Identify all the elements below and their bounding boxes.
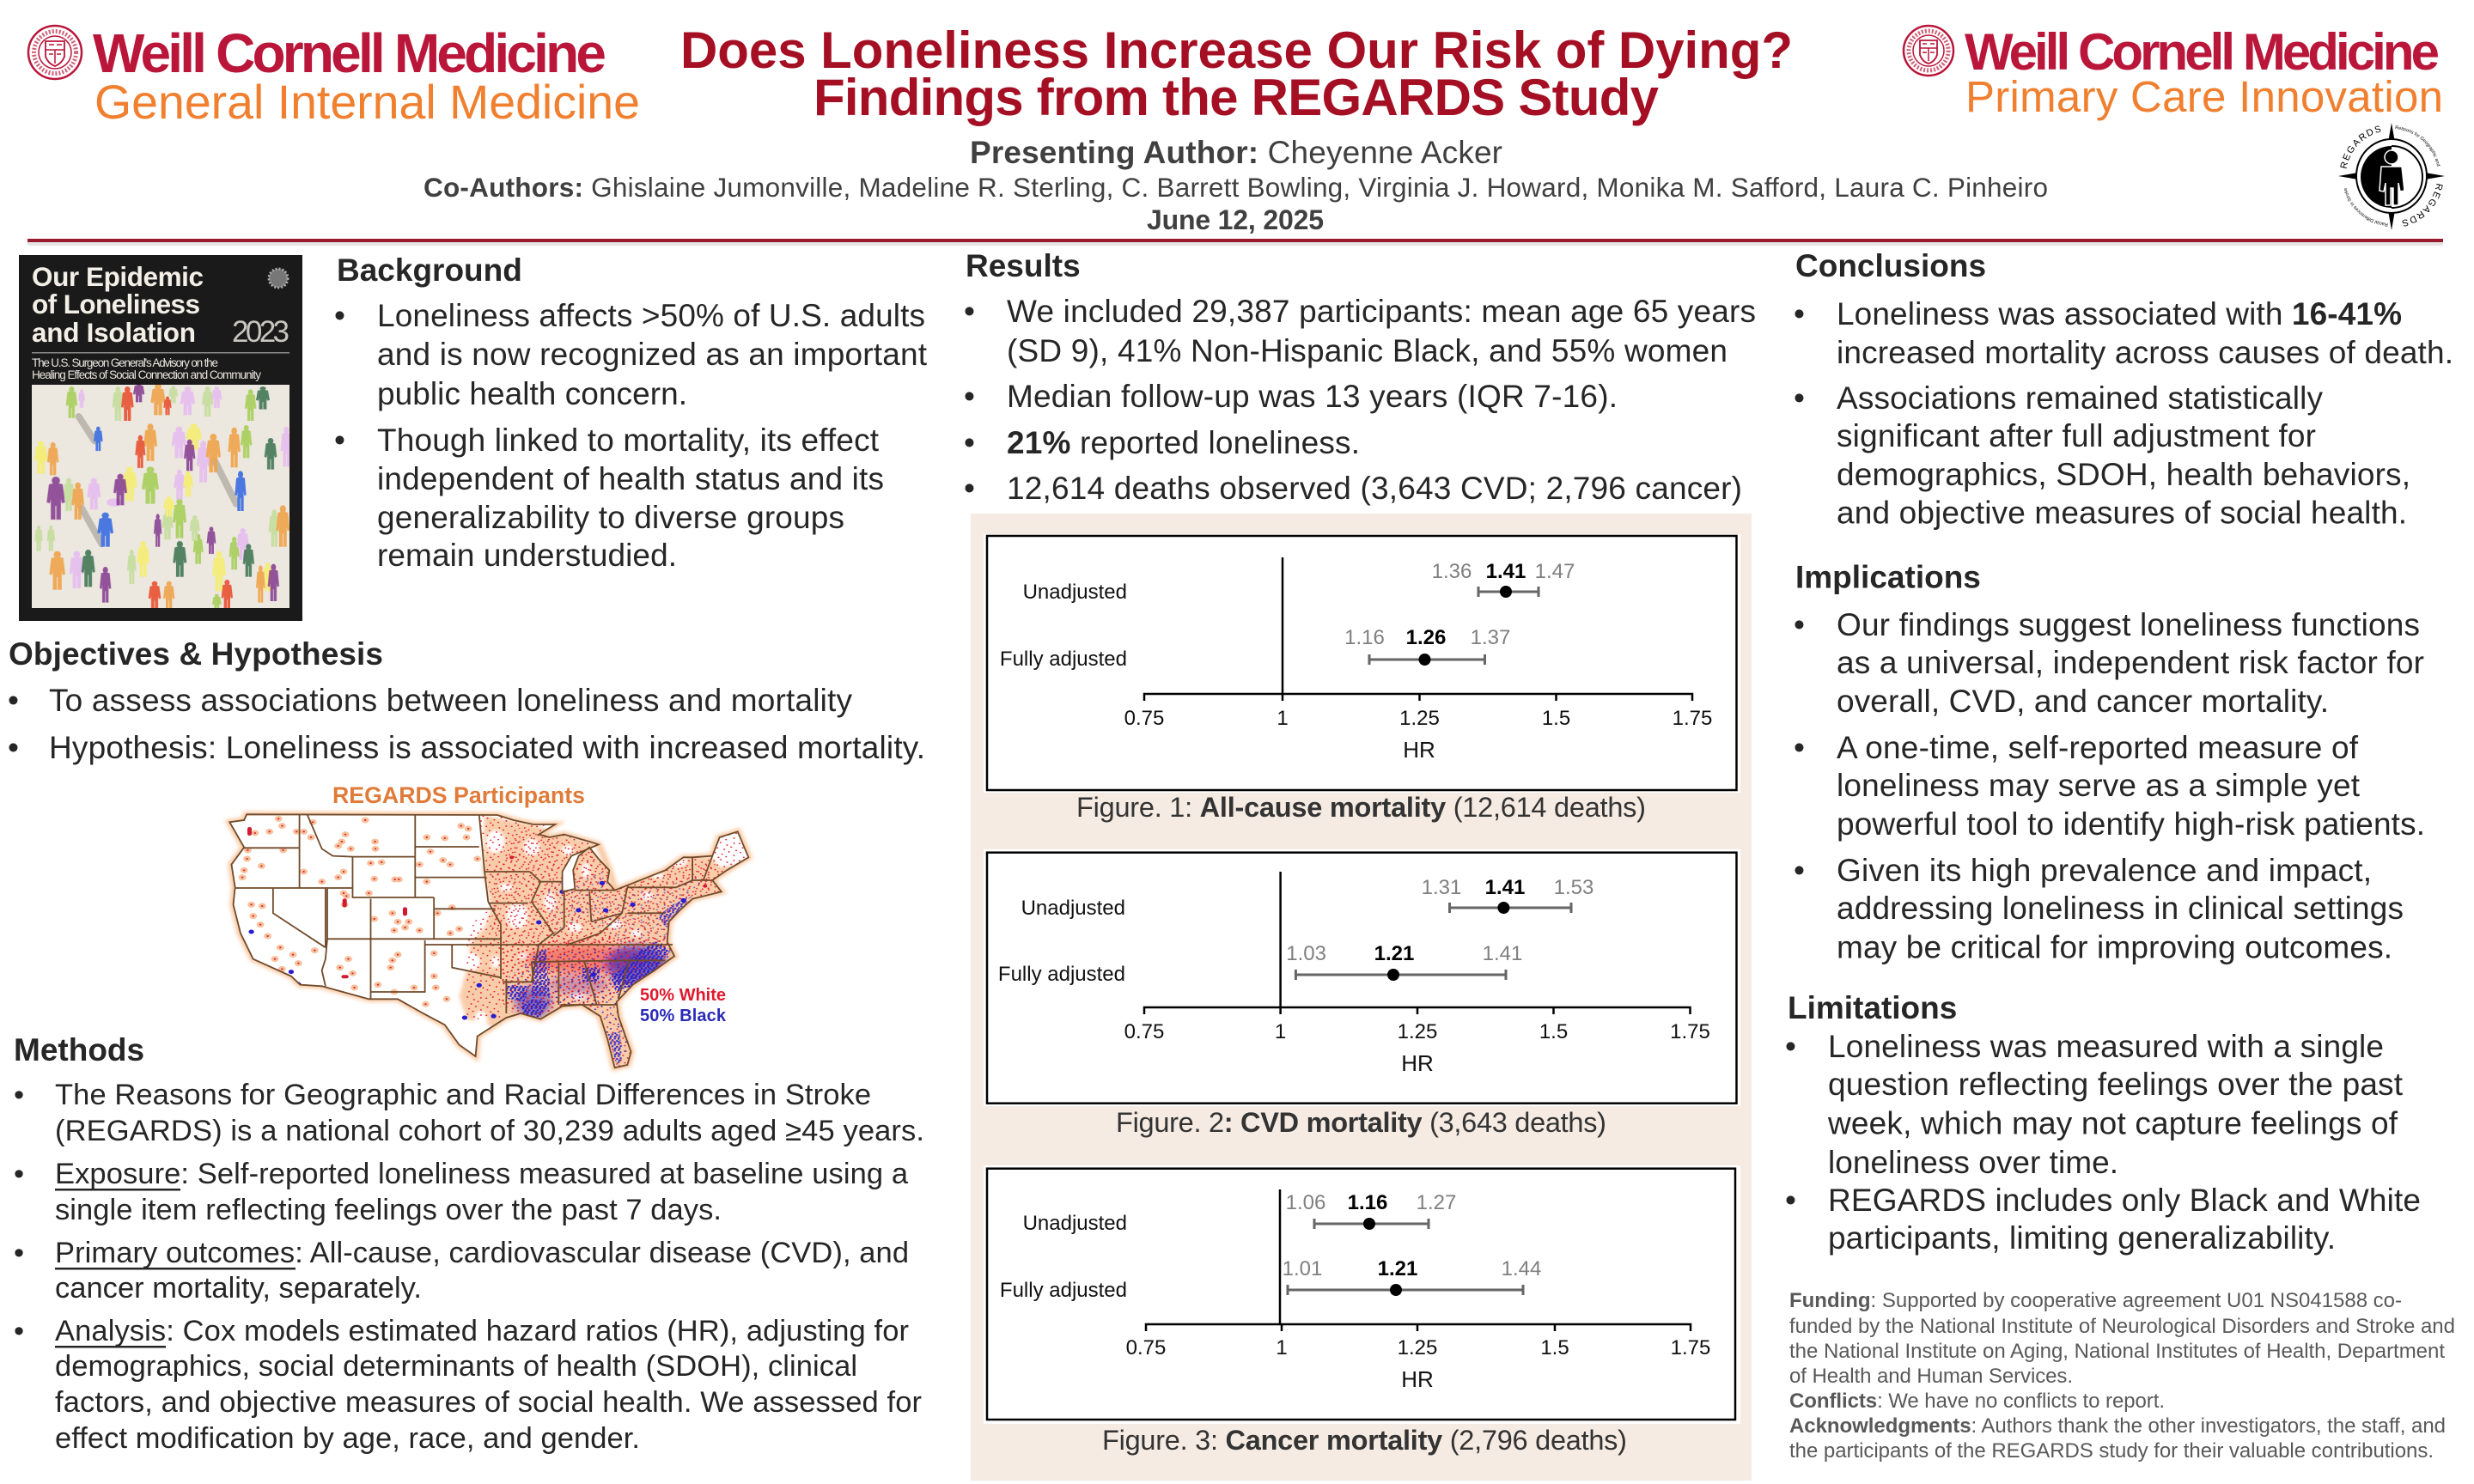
heading: results: Results bbox=[966, 248, 1081, 283]
chart: CVD mortality forest plot bbox=[984, 849, 1740, 1106]
heading: limitations: Limitations bbox=[1788, 990, 1957, 1025]
heading: background: Background bbox=[337, 252, 522, 288]
panel: objectives and hypothesis bbox=[8, 636, 925, 765]
results text: 12,614 deaths observed (3,643 CVD; 2,796 cancer) bbox=[1007, 471, 1742, 506]
authors block: Presenting Author: Cheyenne Acker bbox=[970, 135, 1502, 170]
cover title: and Isolation bbox=[32, 317, 196, 348]
icon: Weill Cornell seal right bbox=[1904, 26, 1953, 76]
heading: objectives: Objectives & Hypothesis bbox=[9, 636, 383, 672]
heading: conclusions: Conclusions bbox=[1795, 248, 1986, 283]
implications text: • bbox=[1794, 730, 1805, 765]
chart: all-cause mortality forest plot: HR bbox=[1403, 737, 1435, 763]
cover illustration of people bbox=[32, 382, 292, 611]
background text bbox=[334, 298, 928, 573]
icon: REGARDS compass logo: REGARDS bbox=[2340, 125, 2381, 168]
panel: conclusions bbox=[1794, 248, 2453, 531]
implications text: addressing loneliness in clinical settings bbox=[1837, 891, 2404, 926]
chart: cancer mortality forest plot: Unadjusted bbox=[1023, 1212, 1127, 1235]
chart: CVD mortality forest plot: 1.25 bbox=[1398, 1020, 1437, 1043]
cover title: of Loneliness bbox=[32, 289, 200, 319]
authors block: Co-Authors: Ghislaine Jumonville, Madeline R. Sterling, C. Barrett Bowling, Virginia J. Howard, Monika M. Safford, Laura C. Pinheiro bbox=[424, 172, 2048, 203]
methods text: Primary outcomes: All-cause, cardiovascular disease (CVD), and bbox=[55, 1237, 909, 1269]
implications text: • bbox=[1794, 853, 1805, 888]
panel: funding, conflicts, acknowledgments: funded by the National Institute of Neurological Disorders and Stroke and bbox=[1789, 1315, 2455, 1338]
caption: figure 2: Figure. 2: CVD mortality (3,643 deaths) bbox=[1116, 1107, 1606, 1138]
methods text: • bbox=[14, 1315, 24, 1347]
row: unadjusted 1.41: 1.41 bbox=[1485, 876, 1525, 899]
limitations text: Loneliness was measured with a single bbox=[1828, 1029, 2384, 1064]
background text: remain understudied. bbox=[377, 538, 677, 573]
title: Does Loneliness Increase Our Risk of Dying? bbox=[680, 21, 1793, 79]
panel: Surgeon General advisory cover bbox=[19, 255, 302, 621]
limitations text: REGARDS includes only Black and White bbox=[1828, 1183, 2421, 1218]
chart: CVD mortality forest plot: Fully adjusted bbox=[998, 963, 1125, 986]
chart: all-cause mortality forest plot bbox=[984, 534, 1740, 793]
limitations text: loneliness over time. bbox=[1828, 1145, 2118, 1180]
cover subtitle: Healing Effects of Social Connection and Community bbox=[32, 368, 261, 381]
methods text bbox=[14, 1079, 924, 1455]
header divider bbox=[27, 239, 2443, 246]
conclusions text: demographics, SDOH, health behaviors, bbox=[1837, 457, 2410, 492]
chart: all-cause mortality forest plot: 1.25 bbox=[1399, 707, 1440, 730]
panel: funding, conflicts, acknowledgments: Acknowledgments: Authors thank the other investigators, the staff, and bbox=[1789, 1414, 2446, 1438]
chart: all-cause mortality forest plot: 1.5 bbox=[1542, 707, 1570, 730]
background text: and is now recognized as an important bbox=[377, 337, 928, 372]
conclusions text bbox=[1794, 296, 2453, 531]
methods text: The Reasons for Geographic and Racial Differences in Stroke bbox=[55, 1079, 871, 1111]
methods text: demographics, social determinants of health (SDOH), clinical bbox=[55, 1350, 857, 1383]
methods text: • bbox=[14, 1237, 24, 1269]
panel: limitations bbox=[1785, 990, 2421, 1256]
row: fully adjusted 1.21: 1.01 bbox=[1283, 1257, 1322, 1280]
implications text: • bbox=[1794, 607, 1805, 642]
conclusions text: Loneliness was associated with 16-41% bbox=[1837, 296, 2402, 331]
logo wordmark: Weill Cornell Medicine bbox=[93, 22, 606, 84]
chart: cancer mortality forest plot: 1.25 bbox=[1398, 1336, 1437, 1359]
chart: cancer mortality forest plot: 1 bbox=[1276, 1336, 1288, 1359]
row: fully adjusted 1.21: 1.21 bbox=[1378, 1257, 1417, 1280]
implications text: as a universal, independent risk factor for bbox=[1837, 645, 2424, 680]
methods text: cancer mortality, separately. bbox=[55, 1272, 422, 1305]
row: fully adjusted 1.21 bbox=[1283, 1257, 1541, 1296]
chart: all-cause mortality forest plot: 1 bbox=[1277, 707, 1289, 730]
limitations text: • bbox=[1785, 1183, 1796, 1218]
conclusions text: • bbox=[1794, 380, 1805, 416]
chart: all-cause mortality forest plot: 1.75 bbox=[1673, 707, 1712, 730]
map title: REGARDS Participants bbox=[332, 782, 585, 808]
implications text: may be critical for improving outcomes. bbox=[1837, 929, 2392, 965]
authors block: June 12, 2025 bbox=[1147, 204, 1324, 235]
panel: results bbox=[964, 248, 1756, 506]
background text: Loneliness affects >50% of U.S. adults bbox=[377, 298, 925, 333]
row: unadjusted 1.41: 1.36 bbox=[1432, 560, 1472, 583]
methods text: Exposure: Self-reported loneliness measured at baseline using a bbox=[55, 1158, 909, 1190]
results text: • bbox=[964, 294, 975, 329]
results text: We included 29,387 participants: mean age 65 years bbox=[1007, 294, 1756, 329]
background text: independent of health status and its bbox=[377, 461, 884, 496]
icon: surgeon general seal bbox=[269, 269, 288, 288]
division name: General Internal Medicine bbox=[94, 76, 640, 129]
row: unadjusted 1.41: 1.53 bbox=[1554, 876, 1593, 899]
implications text: overall, CVD, and cancer mortality. bbox=[1837, 684, 2329, 719]
row: fully adjusted 1.21: 1.41 bbox=[1483, 942, 1522, 965]
limitations text: participants, limiting generalizability. bbox=[1828, 1220, 2336, 1256]
icon: REGARDS compass logo bbox=[2338, 123, 2445, 230]
chart: CVD mortality forest plot: 1.5 bbox=[1539, 1020, 1568, 1043]
chart: cancer mortality forest plot bbox=[984, 1165, 1740, 1424]
chart: CVD mortality forest plot: 1.75 bbox=[1670, 1020, 1710, 1043]
implications text: Given its high prevalence and impact, bbox=[1837, 853, 2372, 888]
results text: Median follow-up was 13 years (IQR 7-16). bbox=[1007, 379, 1618, 414]
row: fully adjusted 1.26: 1.26 bbox=[1406, 626, 1446, 649]
cover title: Our Epidemic bbox=[32, 261, 204, 292]
heading: implications: Implications bbox=[1795, 560, 1981, 594]
panel: background bbox=[334, 252, 928, 573]
chart: CVD mortality forest plot: 1 bbox=[1275, 1020, 1286, 1043]
methods text: Analysis: Cox models estimated hazard ratios (HR), adjusting for bbox=[55, 1315, 909, 1347]
row: fully adjusted 1.21: 1.44 bbox=[1502, 1257, 1541, 1280]
row: unadjusted 1.41: 1.47 bbox=[1535, 560, 1575, 583]
chart: CVD mortality forest plot: 0.75 bbox=[1124, 1020, 1164, 1043]
header logo: Weill Cornell Medicine Primary Care Innovation bbox=[1904, 23, 2443, 121]
row: unadjusted 1.41 bbox=[1422, 876, 1593, 914]
logo wordmark right: Weill Cornell Medicine bbox=[1965, 23, 2440, 81]
panel: implications bbox=[1794, 560, 2425, 965]
objectives text: To assess associations between loneliness and mortality bbox=[49, 683, 852, 718]
heading: methods: Methods bbox=[14, 1032, 144, 1067]
chart: cancer mortality forest plot: 1.5 bbox=[1540, 1336, 1569, 1359]
chart: CVD mortality forest plot: Unadjusted bbox=[1021, 897, 1125, 920]
row: unadjusted 1.41: 1.41 bbox=[1486, 560, 1526, 583]
results text bbox=[964, 294, 1756, 506]
methods text: factors, and objective measures of social health. We assessed for bbox=[55, 1386, 922, 1419]
objectives text: • bbox=[8, 730, 19, 765]
row: unadjusted 1.41 bbox=[1432, 560, 1575, 598]
limitations text: week, which may not capture feelings of bbox=[1827, 1106, 2398, 1140]
icon: REGARDS compass logo: Racial Differences in Stroke bbox=[2343, 188, 2388, 227]
objectives text bbox=[8, 683, 925, 765]
chart: all-cause mortality forest plot: Unadjusted bbox=[1023, 581, 1127, 604]
chart: all-cause mortality forest plot: 0.75 bbox=[1124, 707, 1164, 730]
panel: funding, conflicts, acknowledgments: the National Institute on Aging, National Institutes of Health, Department bbox=[1789, 1340, 2445, 1363]
methods text: effect modification by age, race, and gender. bbox=[55, 1422, 640, 1455]
panel: methods bbox=[14, 1032, 924, 1455]
row: unadjusted 1.16: 1.16 bbox=[1348, 1191, 1387, 1214]
limitations text: question reflecting feelings over the past bbox=[1828, 1067, 2404, 1102]
panel: funding, conflicts, acknowledgments: Conflicts: We have no conflicts to report. bbox=[1789, 1390, 2165, 1413]
conclusions text: Associations remained statistically bbox=[1837, 380, 2323, 416]
panel: funding, conflicts, acknowledgments: Funding: Supported by cooperative agreement U01 NS041588 co- bbox=[1789, 1289, 2402, 1312]
row: unadjusted 1.16: 1.06 bbox=[1286, 1191, 1325, 1214]
methods text: single item reflecting feelings over the past 7 days. bbox=[55, 1194, 722, 1226]
implications text bbox=[1794, 607, 2425, 965]
caption: figure 3: Figure. 3: Cancer mortality (2,796 deaths) bbox=[1102, 1425, 1627, 1456]
panel: funding, conflicts, acknowledgments bbox=[1789, 1289, 2455, 1463]
division name right: Primary Care Innovation bbox=[1965, 72, 2443, 121]
map: REGARDS participants bbox=[221, 782, 756, 1073]
background text: generalizability to diverse groups bbox=[377, 500, 844, 535]
row: fully adjusted 1.26: 1.37 bbox=[1471, 626, 1510, 649]
header logo: Weill Cornell Medicine General Internal Medicine bbox=[28, 22, 640, 129]
row: fully adjusted 1.21: 1.21 bbox=[1374, 942, 1414, 965]
methods text: • bbox=[14, 1158, 24, 1190]
panel: funding, conflicts, acknowledgments: the participants of the REGARDS study for their valuable contributions. bbox=[1789, 1439, 2434, 1463]
background text: • bbox=[334, 423, 345, 458]
map legend: 50% White bbox=[640, 986, 726, 1005]
row: unadjusted 1.16: 1.27 bbox=[1417, 1191, 1456, 1214]
methods text: • bbox=[14, 1079, 24, 1111]
title: Findings from the REGARDS Study bbox=[813, 69, 1660, 126]
implications text: loneliness may serve as a simple yet bbox=[1837, 768, 2361, 803]
cover subtitle: The U.S. Surgeon General's Advisory on the bbox=[32, 356, 218, 369]
icon: REGARDS compass logo: REGARDS bbox=[2402, 184, 2443, 227]
row: fully adjusted 1.26: 1.16 bbox=[1344, 626, 1385, 649]
chart: all-cause mortality forest plot: Fully adjusted bbox=[1000, 648, 1127, 671]
methods text: (REGARDS) is a national cohort of 30,239 adults aged ≥45 years. bbox=[55, 1115, 924, 1147]
background text: • bbox=[334, 298, 345, 333]
map legend bbox=[640, 986, 727, 1025]
row: unadjusted 1.16 bbox=[1286, 1191, 1456, 1230]
panel: funding, conflicts, acknowledgments: of Health and Human Services. bbox=[1789, 1365, 2073, 1388]
limitations text bbox=[1785, 1029, 2421, 1256]
chart: cancer mortality forest plot: 0.75 bbox=[1126, 1336, 1166, 1359]
limitations text: • bbox=[1785, 1029, 1796, 1064]
map legend: 50% Black bbox=[640, 1007, 727, 1025]
conclusions text: significant after full adjustment for bbox=[1837, 418, 2316, 453]
implications text: A one-time, self-reported measure of bbox=[1837, 730, 2359, 765]
chart: cancer mortality forest plot: 1.75 bbox=[1671, 1336, 1710, 1359]
caption: figure 1: Figure. 1: All-cause mortality (12,614 deaths) bbox=[1076, 792, 1646, 823]
results text: • bbox=[964, 379, 975, 414]
US map with participant dots bbox=[221, 807, 756, 1073]
row: fully adjusted 1.21 bbox=[1286, 942, 1522, 981]
row: fully adjusted 1.26 bbox=[1344, 626, 1510, 666]
objectives text: • bbox=[8, 683, 19, 718]
results text: (SD 9), 41% Non-Hispanic Black, and 55% women bbox=[1007, 333, 1728, 368]
conclusions text: and objective measures of social health. bbox=[1837, 495, 2407, 531]
title bbox=[680, 21, 1793, 126]
conclusions text: increased mortality across causes of death. bbox=[1837, 335, 2453, 370]
row: fully adjusted 1.21: 1.03 bbox=[1286, 942, 1326, 965]
results text: 21% reported loneliness. bbox=[1007, 425, 1360, 460]
chart: CVD mortality forest plot: HR bbox=[1401, 1050, 1434, 1076]
panel: figures background bbox=[971, 514, 1752, 1481]
authors block bbox=[424, 135, 2048, 235]
cover title bbox=[32, 261, 204, 348]
state borders bbox=[229, 814, 748, 1067]
conclusions text: • bbox=[1794, 296, 1805, 331]
background text: Though linked to mortality, its effect bbox=[377, 423, 880, 458]
icon: Weill Cornell seal bbox=[28, 26, 82, 79]
chart: cancer mortality forest plot: HR bbox=[1401, 1366, 1434, 1392]
implications text: Our findings suggest loneliness functions bbox=[1837, 607, 2420, 642]
icon: REGARDS compass logo: Reasons for Geographic and bbox=[2395, 125, 2440, 167]
results text: • bbox=[964, 471, 975, 506]
objectives text: Hypothesis: Loneliness is associated with increased mortality. bbox=[49, 730, 925, 765]
row: unadjusted 1.41: 1.31 bbox=[1422, 876, 1461, 899]
results text: • bbox=[964, 425, 975, 460]
cover year: 2023 bbox=[232, 315, 289, 349]
cover subtitle bbox=[32, 356, 261, 381]
background text: public health concern. bbox=[377, 376, 687, 411]
chart: cancer mortality forest plot: Fully adjusted bbox=[1000, 1279, 1127, 1302]
implications text: powerful tool to identify high-risk patients. bbox=[1837, 806, 2425, 842]
